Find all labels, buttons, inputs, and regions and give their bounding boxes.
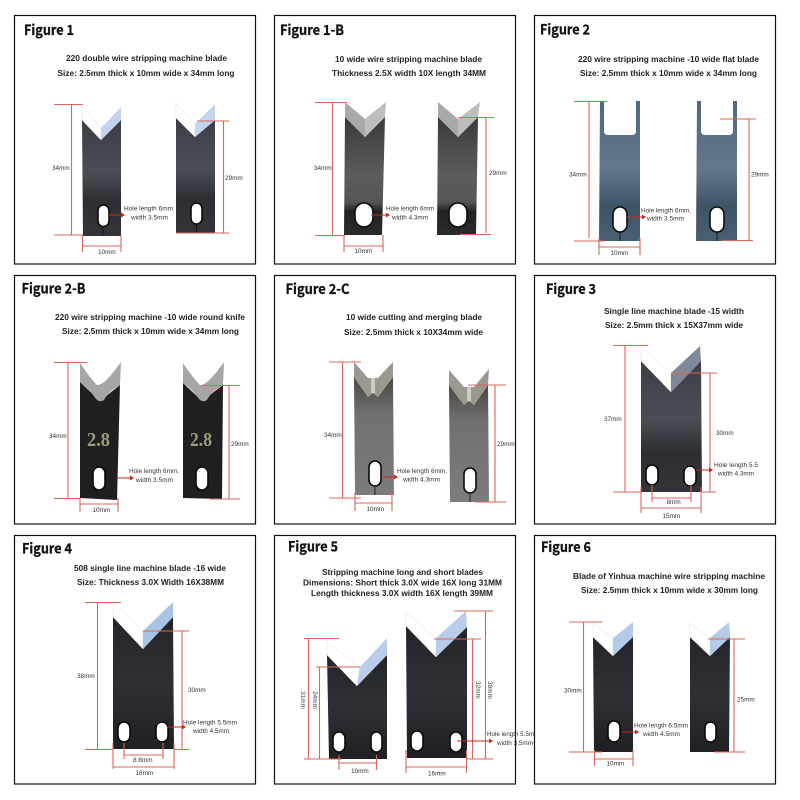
arrow and hole note: Figure 3: Hole length 5.5 — [714, 462, 758, 469]
panel: Figure 2-B — [14, 276, 256, 524]
panel: Figure 6 — [534, 536, 776, 784]
heading: Figure 4: Figure 4 — [22, 538, 72, 558]
blade: Figure 1 left — [82, 106, 121, 236]
blade: Figure 5 short — [327, 638, 387, 759]
description: Figure 2: Size: 2.5mm thick x 10mm wide x 34mm long — [580, 69, 757, 78]
dimension lines: Figure 6: 10mm — [606, 760, 624, 768]
blade: Figure 1 right — [176, 103, 215, 233]
dimension lines: Figure 2-C — [324, 362, 515, 513]
arrow and hole note: Figure 5 — [457, 731, 534, 747]
heading: Figure 6: Figure 6 — [541, 537, 591, 557]
panel: Figure 2-C — [274, 276, 516, 524]
dimension lines: Figure 1: 10mm — [98, 249, 116, 256]
arrow and hole note: Figure 1 — [108, 206, 173, 222]
dimension lines: Figure 2-B: 34mm — [49, 433, 67, 440]
heading: Figure 5: Figure 5 — [288, 536, 338, 556]
dimension lines: Figure 4: 38mm — [77, 673, 95, 680]
heading: Figure 2-B: Figure 2-B — [22, 278, 86, 298]
dimension lines: Figure 2-C: 10mm — [366, 506, 384, 513]
arrow and hole note: Figure 1: width 3.5mm — [130, 214, 168, 222]
arrow and hole note: Figure 3: width 4.3mm — [717, 470, 754, 478]
dimension lines: Figure 5: 32mm — [474, 681, 481, 699]
arrow and hole note: Figure 2: width 3.5mm — [646, 216, 684, 222]
stamp: 2.8 right: 2.8 — [190, 429, 212, 451]
dimension lines: Figure 2-B: 10mm — [92, 507, 110, 514]
blade: Figure 1-B right — [437, 102, 480, 235]
panel: Figure 2 — [534, 16, 776, 264]
dimension lines: Figure 1-B — [314, 102, 507, 255]
description: Figure 5: Length thickness 3.0X width 16X length 39MM — [311, 589, 493, 598]
blade: Figure 6 right — [689, 622, 730, 752]
dimension lines: Figure 2 — [569, 102, 769, 257]
arrow and hole note: Figure 1-B: Hole length 6mm — [386, 206, 434, 212]
dimension lines: Figure 5: 31mm — [299, 691, 306, 709]
blade: Figure 4 — [113, 602, 174, 749]
heading: Figure 1: Figure 1 — [24, 20, 74, 40]
heading: Figure 2-C: Figure 2-C — [286, 279, 350, 299]
dimension lines: Figure 2: 10mm — [610, 250, 628, 257]
dimension lines: Figure 1: 29mm — [225, 175, 243, 182]
description: Figure 3 — [604, 307, 744, 330]
panel: Figure 1-B — [274, 16, 516, 264]
arrow and hole note: Figure 2-C: Hole length 6mm, — [397, 468, 447, 475]
blade: Figure 5 long — [406, 611, 467, 758]
arrow and hole note: Figure 2-B: Hole length 6mm, — [129, 468, 179, 475]
dimension lines: Figure 5: 39mm — [486, 681, 493, 699]
dimension lines: Figure 3: 8mm — [666, 499, 681, 506]
dimension lines: Figure 1-B: 10mm — [354, 248, 372, 255]
arrow and hole note: Figure 2 — [627, 208, 691, 222]
dimension lines: Figure 4: 16mm — [136, 770, 153, 777]
blade: Figure 1-B left — [344, 102, 386, 235]
panel: Figure 5 — [274, 536, 534, 784]
panel: Figure 3 — [534, 276, 776, 524]
dimension lines: Figure 4: 30mm — [188, 687, 206, 694]
description: Figure 6: Size: 2.5mm thick x 10mm wide x 30mm long — [581, 586, 758, 595]
description: Figure 3: Single line machine blade -15 width — [604, 307, 744, 316]
heading: Figure 3: Figure 3 — [546, 279, 596, 299]
blade: Figure 2-B left — [80, 362, 121, 500]
description: Figure 1-B — [332, 55, 486, 78]
dimension lines: Figure 5: 16mm — [428, 770, 446, 778]
description: Figure 3: Size: 2.5mm thick x 15X37mm wide — [605, 321, 743, 330]
dimension lines: Figure 2: 29mm — [751, 172, 769, 178]
description: Figure 4 — [74, 564, 226, 587]
heading: Figure 2: Figure 2 — [540, 20, 590, 40]
dimension lines: Figure 2-B: 29mm — [231, 441, 249, 448]
blade: Figure 3 — [641, 346, 702, 492]
dimension lines: Figure 6 — [564, 622, 755, 768]
description: Figure 2-C: 10 wide cutting and merging blade — [346, 313, 482, 322]
arrow and hole note: Figure 3 — [696, 462, 758, 478]
stamp: 2.8 left: 2.8 — [87, 429, 110, 451]
blade: Figure 2-C right — [449, 369, 489, 502]
dimension lines: Figure 5: 24mm — [311, 691, 318, 709]
arrow and hole note: Figure 2-C — [381, 468, 447, 484]
description: Figure 4: 508 single line machine blade -16 wide — [74, 564, 226, 573]
description: Figure 4: Size: Thickness 3.0X Width 16X38MM — [77, 578, 224, 587]
arrow and hole note: Figure 6: Hole length 6.5mm — [634, 722, 688, 730]
description: Figure 6: Blade of Yinhua machine wire stripping machine — [573, 572, 765, 581]
blade: Figure 2 left — [599, 101, 640, 241]
arrow and hole note: Figure 1-B — [371, 206, 434, 222]
description: Figure 1-B: 10 wide wire stripping machine blade — [335, 55, 482, 64]
arrow and hole note: Figure 4: Hole length 5.5mm — [183, 720, 237, 726]
arrow and hole note: Figure 2: Hole length 6mm, — [641, 208, 691, 214]
dimension lines: Figure 5: 10mm — [351, 768, 369, 775]
description: Figure 2-B — [55, 313, 245, 336]
dimension lines: Figure 2: 34mm — [569, 172, 587, 178]
blade: Figure 2-B right — [183, 362, 224, 499]
description: Figure 5: Stripping machine long and short blades — [322, 568, 483, 577]
panel: Figure 4 — [14, 536, 256, 784]
arrow and hole note: Figure 1-B: width 4.3mm — [391, 214, 428, 222]
dimension lines: Figure 1-B: 29mm — [489, 170, 507, 177]
dimension lines: Figure 3 — [604, 346, 734, 520]
description: Figure 1: Size: 2.5mm thick x 10mm wide x 34mm long — [58, 69, 234, 78]
description: Figure 2-B: 220 wire stripping machine -10 wide round knife — [55, 313, 245, 322]
panel: Figure 1 — [14, 16, 256, 264]
dimension lines: Figure 3: 37mm — [604, 416, 622, 423]
dimension lines: Figure 1 — [52, 104, 243, 256]
dimension lines: Figure 3: 15mm — [662, 513, 680, 520]
arrow and hole note: Figure 2-B — [117, 468, 179, 484]
dimension lines: Figure 6: 25mm — [737, 696, 755, 704]
description: Figure 2 — [578, 55, 759, 78]
dimension lines: Figure 6: 30mm — [564, 688, 582, 694]
description: Figure 1 — [58, 54, 234, 78]
dimension lines: Figure 2-C: 29mm — [497, 441, 515, 448]
dimension lines: Figure 2-B — [49, 362, 249, 514]
description: Figure 1-B: Thickness 2.5X width 10X length 34MM — [332, 69, 486, 78]
description: Figure 2-B: Size: 2.5mm thick x 10mm wide x 34mm long — [62, 327, 239, 336]
dimension lines: Figure 5 — [299, 611, 493, 778]
arrow and hole note: Figure 4: width 4.5mm — [192, 728, 229, 735]
arrow and hole note: Figure 6: width 4.5mm — [642, 731, 680, 738]
arrow and hole note: Figure 4 — [167, 720, 237, 735]
dimension lines: Figure 4 — [77, 602, 206, 777]
dimension lines: Figure 1-B: 34mm — [314, 165, 332, 172]
blade: Figure 2-C left — [354, 362, 394, 495]
description: Figure 5 — [303, 568, 502, 598]
heading: Figure 1-B: Figure 1-B — [280, 20, 344, 40]
arrow and hole note: Figure 6 — [622, 722, 688, 738]
arrow and hole note: Figure 5: Hole length 5.5m — [487, 731, 534, 738]
description: Figure 6 — [573, 572, 765, 595]
description: Figure 1: 220 double wire stripping machine blade — [66, 54, 227, 63]
description: Figure 5: Dimensions: Short thick 3.0X wide 16X long 31MM — [303, 578, 502, 588]
blade: Figure 2 right — [696, 101, 737, 241]
arrow and hole note: Figure 2-B: width 3.5mm — [135, 477, 173, 484]
description: Figure 2-C — [344, 313, 483, 337]
description: Figure 2-C: Size: 2.5mm thick x 10X34mm wide — [344, 328, 483, 337]
dimension lines: Figure 3: 30mm — [716, 430, 734, 437]
dimension lines: Figure 2-C: 34mm — [324, 432, 342, 439]
arrow and hole note: Figure 1: Hole length 6mm — [124, 206, 173, 212]
arrow and hole note: Figure 2-C: width 4.3mm — [402, 476, 440, 484]
blade: Figure 6 left — [593, 622, 633, 752]
dimension lines: Figure 1: 34mm — [52, 165, 70, 172]
description: Figure 2: 220 wire stripping machine -10 wide flat blade — [578, 55, 759, 64]
dimension lines: Figure 4: 8.8mm — [133, 757, 153, 764]
arrow and hole note: Figure 5: width 3.5mm — [496, 740, 533, 747]
